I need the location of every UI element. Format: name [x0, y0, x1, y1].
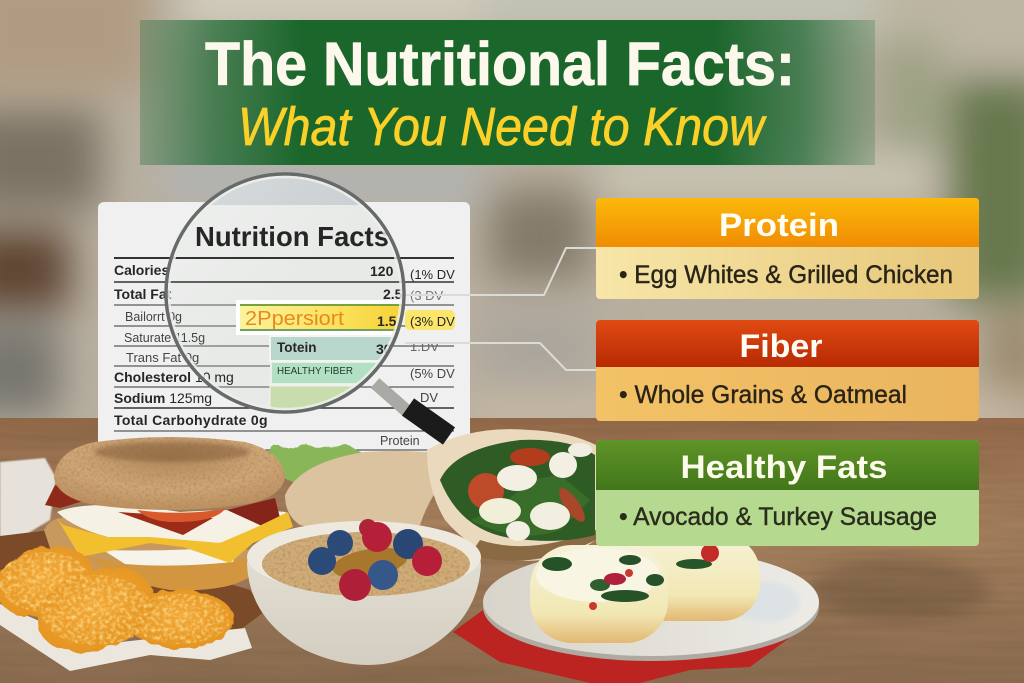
egg whites — [57, 505, 286, 566]
protein text: • Egg Whites & Grilled Chicken — [619, 261, 953, 289]
panel: protein — [596, 198, 979, 299]
lens contents — [168, 178, 402, 410]
wrap filling — [440, 440, 595, 541]
lens contents: Trans Fat 0g — [126, 350, 199, 365]
protein heading: Protein — [719, 207, 839, 243]
healthy fats heading: Healthy Fats — [680, 449, 888, 485]
lens contents: Bailorrt 0g — [125, 310, 182, 324]
nutrition rows: 1.DV — [410, 339, 439, 354]
nutrition rows: Total Fat — [114, 286, 172, 302]
lens contents: 120 — [370, 263, 394, 279]
protein header — [596, 198, 979, 247]
food: wooden board — [0, 530, 264, 630]
bacon — [45, 485, 280, 535]
panel: healthy fats — [596, 440, 979, 546]
food: oatmeal bowl — [247, 519, 481, 665]
highlight: yellow row: 2Ppersiort — [245, 308, 344, 330]
panel: fiber — [596, 320, 979, 421]
bottom muffin — [44, 517, 250, 590]
front egg bite — [530, 545, 668, 643]
connector line: fiber — [405, 343, 596, 370]
wooden table — [0, 418, 1024, 683]
lens contents: Calories — [114, 262, 169, 278]
lens contents: Cholesterol 10 mg — [114, 369, 234, 385]
food: lettuce — [268, 443, 362, 484]
card heading: Nutrition Facts — [195, 221, 389, 252]
oatmeal — [262, 532, 470, 596]
top muffin — [54, 437, 285, 510]
lens rim — [166, 174, 404, 412]
healthy fats header — [596, 440, 979, 490]
nutrition rows: Protein — [380, 434, 420, 448]
nutrition rows: (3 DV — [410, 288, 444, 303]
food: red napkin — [453, 607, 800, 683]
food: egg bites — [530, 535, 760, 643]
lens contents: Saturate 11.5g — [124, 331, 205, 345]
yellow dv highlight — [405, 310, 455, 330]
food: sandwich — [44, 437, 293, 590]
nutrition rows: Calories — [114, 262, 169, 278]
highlight: yellow row — [236, 300, 411, 335]
blurred restaurant background — [0, 0, 1024, 430]
connector line: protein — [405, 248, 596, 295]
title banner — [140, 20, 875, 165]
nutrition rows: (3% DV — [410, 314, 455, 329]
lens contents: Total Fat — [114, 286, 172, 302]
cheese — [57, 512, 293, 563]
nutrition facts card — [98, 202, 470, 457]
nutrition rows: (5% DV — [410, 366, 455, 381]
title line 1: The Nutritional Facts: — [205, 30, 795, 98]
food: plate — [483, 548, 819, 661]
highlight: yellow row: 1.5 — [377, 313, 397, 329]
fiber heading: Fiber — [740, 328, 822, 364]
nutrition rows — [114, 262, 455, 448]
nutrition rows: Cholesterol 10 mg — [114, 369, 234, 385]
nutrition rows: Sodium 125mg — [114, 390, 212, 406]
nutrition rows: Saturate 11.5g — [124, 331, 205, 345]
title line 2: What You Need to Know — [238, 97, 767, 157]
highlight: protein row: 30 — [376, 341, 392, 357]
highlight: fiber row — [271, 362, 381, 384]
fiber header — [596, 320, 979, 367]
food: paper under sandwich — [0, 458, 56, 547]
berries — [308, 519, 442, 601]
highlight: protein row: Totein — [277, 340, 316, 355]
highlight: green row — [270, 386, 356, 410]
food: hash browns — [0, 536, 252, 671]
back egg bite — [623, 535, 760, 621]
nutrition rows: Bailorrt 0g — [125, 310, 182, 324]
nutrition rows: DV — [420, 390, 438, 405]
highlight: protein row — [270, 336, 400, 361]
lens contents: 2. — [378, 390, 390, 406]
highlight: fiber row: HEALTHY FIBER — [277, 365, 353, 377]
nutrition rows: Trans Fat 0g — [126, 350, 199, 365]
lens contents: 2.5 — [383, 286, 403, 302]
magnifier handle — [375, 383, 449, 436]
magnifying glass — [164, 172, 455, 445]
healthy fats text: • Avocado & Turkey Sausage — [619, 503, 937, 531]
fiber text: • Whole Grains & Oatmeal — [619, 381, 907, 409]
nutrition rows: (1% DV — [410, 267, 455, 282]
food: wrap — [285, 429, 596, 561]
nutrition rows: Total Carbohydrate 0g — [114, 412, 268, 428]
